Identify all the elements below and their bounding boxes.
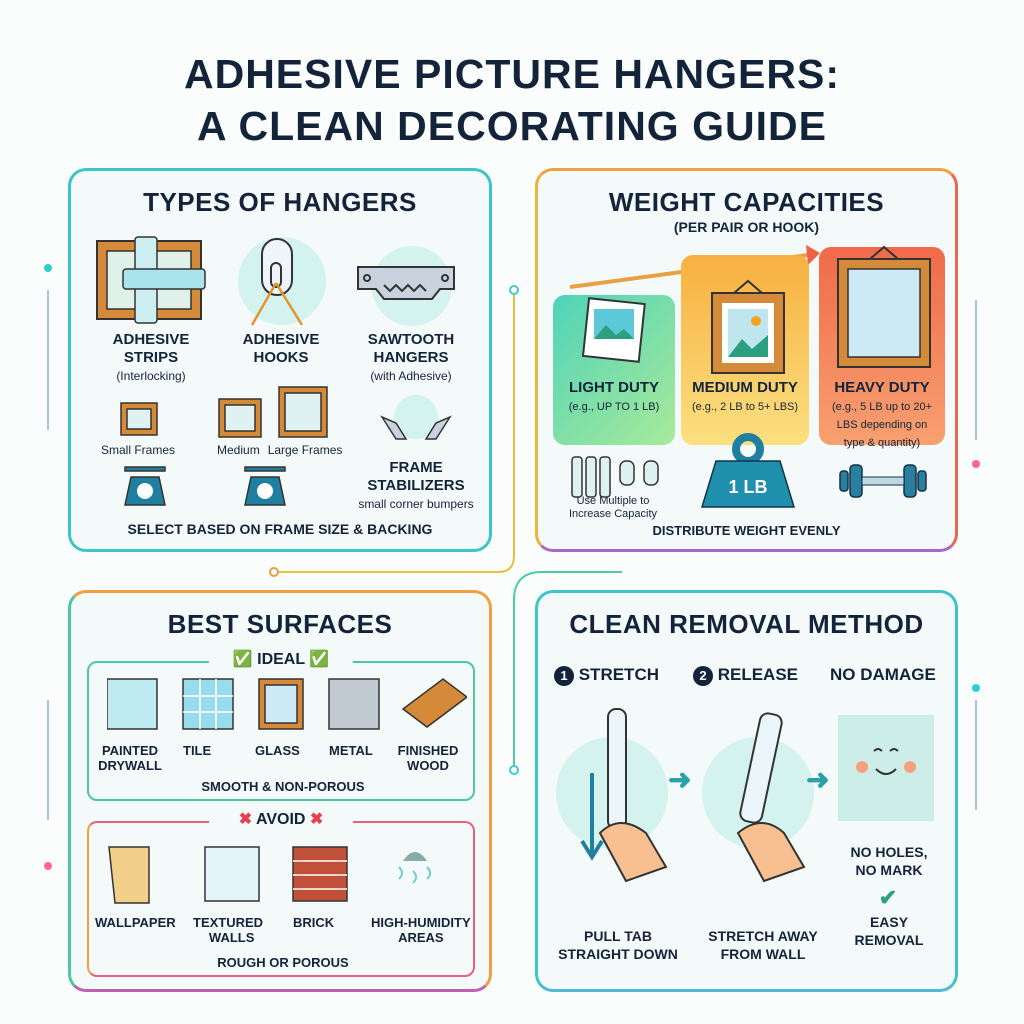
label: stretch away: FROM WALL: [721, 946, 805, 962]
steps row: 2: [699, 668, 707, 683]
label: medium duty: [692, 379, 798, 413]
group: ideal: DRYWALL: [98, 758, 162, 773]
labels: ideal surfaces: [98, 743, 458, 773]
group: avoid: TEXTURED: [193, 915, 263, 930]
icon: medium frame: [711, 280, 785, 374]
label: strips: STRIPS: [124, 349, 178, 366]
group: avoid: WALLPAPER: [95, 915, 176, 930]
icon: scales: [124, 466, 286, 506]
group: ideal: [87, 661, 475, 801]
group: avoid: HIGH-HUMIDITY: [371, 915, 471, 930]
label: ideal: ✅ IDEAL ✅: [233, 651, 329, 668]
label: pull tab: STRAIGHT DOWN: [558, 946, 678, 962]
label: easy removal: [855, 914, 923, 948]
illustration: clean wall: [838, 715, 934, 821]
label: heavy duty: type & quantity): [844, 437, 920, 449]
label: easy removal: REMOVAL: [855, 932, 923, 948]
steps row: 1: [560, 668, 568, 683]
label: no holes: NO HOLES,: [850, 844, 928, 860]
label: avoid: [209, 809, 353, 829]
tier: light: [553, 295, 675, 445]
label: stabilizers: FRAME: [389, 459, 443, 476]
label: strips: (Interlocking): [116, 369, 186, 383]
label: no holes: [850, 844, 928, 878]
label: use multiple: Increase Capacity: [569, 508, 657, 520]
label: heavy duty: [832, 379, 932, 449]
footer note: DISTRIBUTE WEIGHT EVENLY: [652, 523, 841, 538]
icon: sawtooth: [357, 246, 455, 326]
icon: mirror: [837, 246, 931, 368]
icon: 1lb weight: [701, 433, 795, 508]
illustration: release: [702, 712, 814, 882]
icon: 1lb weight: 1 LB: [728, 477, 768, 497]
label: medium duty: MEDIUM DUTY: [692, 379, 798, 396]
label: hooks: [243, 331, 319, 366]
title: ADHESIVE PICTURE HANGERS:: [184, 51, 840, 97]
label: heavy duty: (e.g., 5 LB up to 20+: [832, 401, 932, 413]
label: strips: ADHESIVE: [113, 331, 189, 348]
note: rough: ROUGH OR POROUS: [217, 955, 349, 970]
group: avoid: [87, 821, 475, 977]
tier: medium: [681, 255, 809, 445]
group: ideal: WOOD: [407, 758, 449, 773]
group: ideal: TILE: [183, 743, 211, 758]
icons: avoid surfaces: [108, 846, 432, 904]
label: stabilizers: [358, 459, 474, 511]
note: smooth: SMOOTH & NON-POROUS: [201, 779, 365, 794]
icon: dumbbell: [839, 464, 927, 498]
icon: multiple strips: [571, 456, 659, 498]
panel: clean removal: [535, 590, 958, 992]
label: frame sizes: Small Frames Medium Large Frames: [101, 443, 342, 457]
arrow: ➜: [806, 764, 829, 795]
label: hooks: ADHESIVE: [243, 331, 319, 348]
label: hooks: HOOKS: [253, 349, 308, 366]
label: use multiple: [569, 495, 657, 520]
group: avoid: WALLS: [209, 930, 254, 945]
label: sawtooth: (with Adhesive): [370, 369, 452, 383]
footer note: SELECT BASED ON FRAME SIZE & BACKING: [128, 521, 432, 537]
group: avoid: BRICK: [293, 915, 334, 930]
group: ideal: GLASS: [255, 743, 300, 758]
icons: ideal surfaces: [107, 678, 467, 730]
label: easy removal: EASY: [870, 914, 908, 930]
steps row: STRETCH RELEASE NO DAMAGE: [579, 665, 936, 684]
label: ideal: [209, 649, 353, 669]
labels: avoid surfaces: [95, 915, 471, 945]
label: strips: [113, 331, 189, 383]
subheading: (PER PAIR OR HOOK): [674, 219, 819, 235]
label: sawtooth: SAWTOOTH: [368, 331, 454, 348]
label: sawtooth: [368, 331, 454, 383]
arrow: [570, 245, 820, 289]
label: no holes: NO MARK: [856, 862, 922, 878]
panel: weight capacities: [535, 168, 958, 552]
icon: frames: [120, 386, 328, 438]
heading: TYPES OF HANGERS: [143, 187, 417, 217]
label: avoid: ✖ AVOID ✖: [239, 811, 323, 828]
title: A CLEAN DECORATING GUIDE: [197, 103, 827, 149]
icon: frame stabilizers: [380, 395, 452, 440]
group: ideal: METAL: [329, 743, 373, 758]
label: light duty: [569, 379, 659, 413]
heading: BEST SURFACES: [168, 609, 392, 639]
group: avoid: AREAS: [398, 930, 444, 945]
icon: adhesive strips: [96, 236, 206, 324]
panel: types of hangers: [68, 168, 492, 552]
title: [184, 51, 840, 149]
group: ideal: FINISHED: [398, 743, 458, 758]
label: medium duty: (e.g., 2 LB to 5+ LBS): [692, 401, 798, 413]
heading: CLEAN REMOVAL METHOD: [569, 609, 924, 639]
label: sawtooth: HANGERS: [373, 349, 448, 366]
heading: WEIGHT CAPACITIES: [609, 187, 884, 217]
label: stretch away: STRETCH AWAY: [708, 928, 818, 944]
label: stretch away: [708, 928, 818, 962]
label: light duty: LIGHT DUTY: [569, 379, 659, 396]
icon: check: ✔: [879, 885, 897, 910]
label: pull tab: [558, 928, 678, 962]
tier: heavy: [819, 247, 945, 445]
label: stabilizers: small corner bumpers: [358, 497, 474, 511]
illustration: stretch: [556, 708, 668, 882]
label: use multiple: Use Multiple to: [577, 495, 649, 507]
group: ideal: PAINTED: [102, 743, 158, 758]
label: heavy duty: HEAVY DUTY: [834, 379, 930, 396]
label: stabilizers: STABILIZERS: [367, 477, 465, 494]
label: heavy duty: LBS depending on: [837, 419, 927, 431]
label: light duty: (e.g., UP TO 1 LB): [569, 401, 659, 413]
arrow: ➜: [668, 764, 691, 795]
icon: adhesive hooks: [238, 237, 326, 326]
panel: best surfaces: [68, 590, 492, 992]
label: pull tab: PULL TAB: [584, 928, 652, 944]
icon: photo: [582, 297, 646, 363]
